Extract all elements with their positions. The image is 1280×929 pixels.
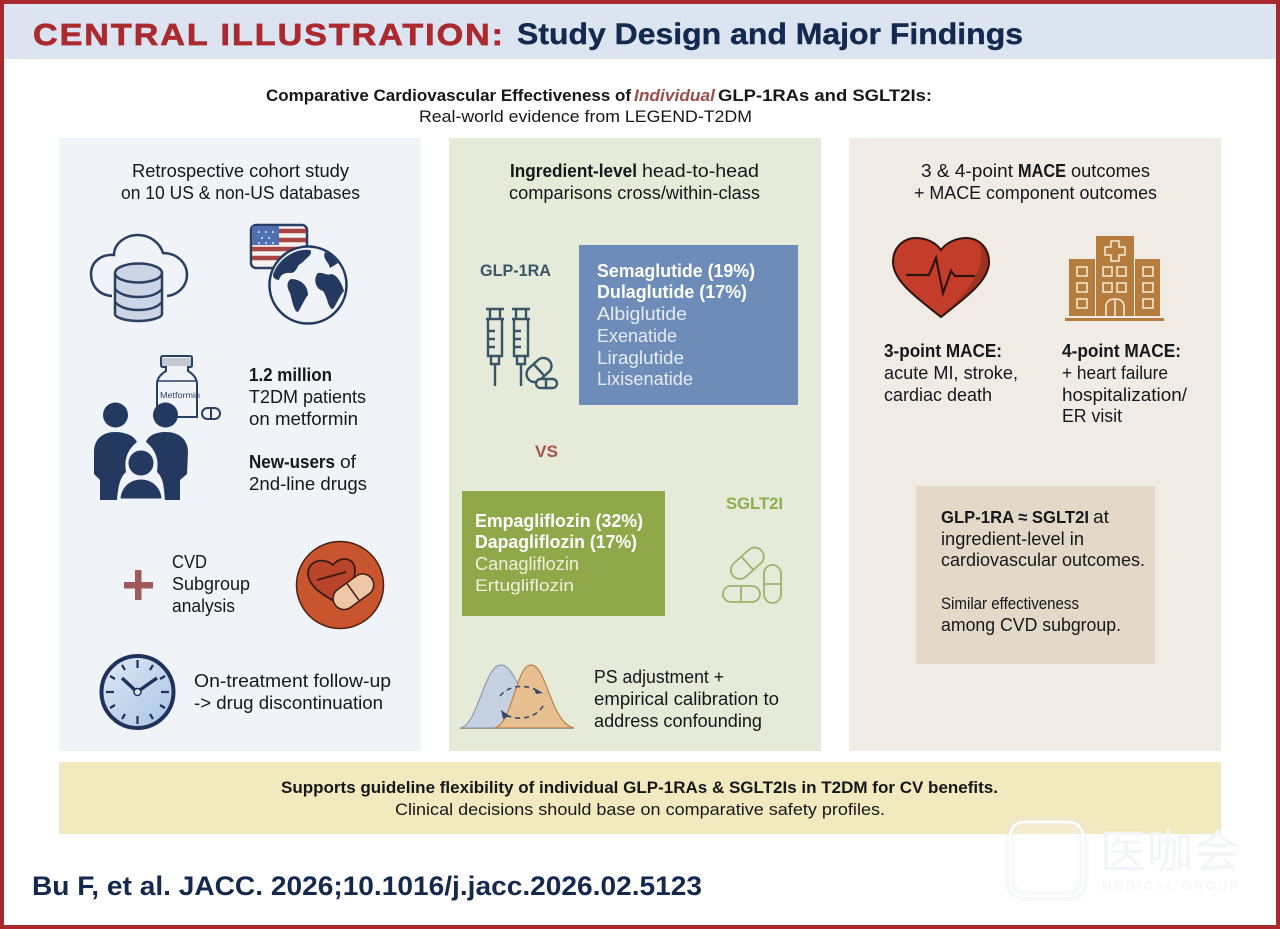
text: 4-point MACE: + heart failure xyxy=(1062,363,1168,383)
subtitle: Comparative Cardiovascular Effectiveness of xyxy=(266,86,631,105)
panel heading: ingredient-level: comparisons cross/within-class xyxy=(509,183,760,203)
icon: heart and pill xyxy=(296,542,384,628)
text: patient counts: 1.2 million xyxy=(249,365,332,385)
box: GLP-1RA drugs: Dulaglutide (17%) xyxy=(597,282,747,302)
watermark: 医咖会 xyxy=(1100,826,1240,878)
watermark xyxy=(1010,822,1240,896)
box: GLP-1RA drugs: Liraglutide xyxy=(597,348,684,368)
title banner xyxy=(4,4,1276,59)
title banner: CENTRAL ILLUSTRATION: xyxy=(33,17,505,52)
text: patient counts: New-users xyxy=(249,452,335,472)
text: CVD subgroup xyxy=(172,552,250,616)
panel heading: MACE outcomes: + MACE component outcomes xyxy=(914,183,1157,203)
text: 3-point MACE: acute MI, stroke, xyxy=(884,363,1018,383)
text: patient counts xyxy=(249,365,367,494)
callout: key finding: GLP-1RA ≈ SGLT2I xyxy=(941,507,1089,527)
text: PS adjustment: PS adjustment + xyxy=(594,667,724,687)
box: GLP-1RA drugs: Semaglutide (19%) xyxy=(597,261,755,281)
text: 3-point MACE: 3-point MACE: xyxy=(884,341,1002,361)
icon: SGLT2I pills xyxy=(723,544,781,603)
icon: US flag and globe xyxy=(251,225,346,324)
box: SGLT2I drugs xyxy=(462,491,665,616)
panel heading: MACE outcomes xyxy=(914,161,1157,203)
panel heading: ingredient-level xyxy=(509,161,760,203)
conclusion banner: Clinical decisions should base on comparative safety profiles. xyxy=(395,800,885,819)
subtitle: GLP-1RAs and SGLT2Is: xyxy=(718,86,932,105)
callout: key finding xyxy=(916,486,1155,664)
chart: propensity score distributions xyxy=(460,665,574,728)
callout: key finding: at xyxy=(1093,507,1109,527)
panel heading: MACE outcomes: MACE xyxy=(1018,161,1066,181)
icon: patients with metformin bottle xyxy=(94,356,220,500)
watermark: MEDICAL GROUP xyxy=(1102,879,1238,893)
text: 3-point MACE xyxy=(884,341,1018,405)
box: SGLT2I drugs: Canagliflozin xyxy=(475,554,579,574)
text: follow-up: -> drug discontinuation xyxy=(194,693,383,713)
text: 4-point MACE: ER visit xyxy=(1062,406,1122,426)
icon: clock xyxy=(102,656,174,728)
panel heading: MACE outcomes: outcomes xyxy=(1071,161,1150,181)
icon: plus xyxy=(124,570,153,600)
label: SGLT2I: SGLT2I xyxy=(726,494,783,513)
label: GLP-1RA: GLP-1RA xyxy=(480,261,551,280)
text: 4-point MACE xyxy=(1062,341,1187,426)
text: PS adjustment xyxy=(594,667,779,731)
conclusion banner: Supports guideline flexibility of individual GLP-1RAs & SGLT2Is in T2DM for CV benefits. xyxy=(281,778,998,797)
label: VS: VS xyxy=(535,442,558,461)
box: SGLT2I drugs: Ertugliflozin xyxy=(475,576,574,595)
panel heading: ingredient-level: head-to-head xyxy=(642,161,759,181)
panel: outcomes xyxy=(849,138,1221,751)
box: GLP-1RA drugs xyxy=(579,245,798,405)
subtitle xyxy=(266,86,932,126)
text: patient counts: of xyxy=(340,452,357,472)
text: patient counts: 2nd-line drugs xyxy=(249,474,367,494)
icon: hospital xyxy=(1065,236,1164,321)
text: 4-point MACE: hospitalization/ xyxy=(1062,385,1187,405)
text: CVD subgroup: analysis xyxy=(172,596,235,616)
title banner: Study Design and Major Findings xyxy=(517,18,1023,51)
callout: key finding: cardiovascular outcomes. xyxy=(941,550,1145,570)
callout: key finding: Similar effectiveness xyxy=(941,594,1079,613)
text: patient counts: on metformin xyxy=(249,409,358,429)
panel heading: cohort study xyxy=(121,161,360,203)
text: CVD subgroup: CVD xyxy=(172,552,207,572)
callout: key finding: ingredient-level in xyxy=(941,529,1084,549)
callout: key finding: among CVD subgroup. xyxy=(941,615,1121,635)
icon: cloud database xyxy=(91,235,187,321)
panel heading: cohort study: Retrospective cohort study xyxy=(132,161,349,181)
text: follow-up: On-treatment follow-up xyxy=(194,671,391,691)
box: GLP-1RA drugs: Albiglutide xyxy=(597,304,687,324)
box: GLP-1RA drugs: Exenatide xyxy=(597,326,677,346)
panel heading: MACE outcomes: 3 & 4-point xyxy=(921,161,1013,181)
icon: patients with metformin bottle: Metformin xyxy=(160,391,200,400)
icon: syringes and pills xyxy=(486,309,557,388)
panel: study population xyxy=(59,138,421,751)
box: SGLT2I drugs: Empagliflozin (32%) xyxy=(475,511,643,531)
icon: heart with ECG xyxy=(893,238,989,317)
text: 4-point MACE: 4-point MACE: xyxy=(1062,341,1181,361)
text: follow-up xyxy=(194,671,391,713)
citation: Bu F, et al. JACC. 2026;10.1016/j.jacc.2026.02.5123 xyxy=(32,871,702,901)
subtitle: Individual xyxy=(634,86,716,105)
box: GLP-1RA drugs: Lixisenatide xyxy=(597,369,693,389)
panel: head-to-head comparisons xyxy=(449,138,821,751)
panel heading: cohort study: on 10 US & non-US databases xyxy=(121,183,360,203)
box: SGLT2I drugs: Dapagliflozin (17%) xyxy=(475,532,637,552)
text: PS adjustment: empirical calibration to xyxy=(594,689,779,709)
text: 3-point MACE: cardiac death xyxy=(884,385,992,405)
text: CVD subgroup: Subgroup xyxy=(172,574,250,594)
panel heading: ingredient-level: Ingredient-level xyxy=(510,161,637,181)
text: PS adjustment: address confounding xyxy=(594,711,762,731)
text: patient counts: T2DM patients xyxy=(249,387,366,407)
conclusion banner xyxy=(59,762,1221,834)
subtitle: Real-world evidence from LEGEND-T2DM xyxy=(419,107,752,126)
